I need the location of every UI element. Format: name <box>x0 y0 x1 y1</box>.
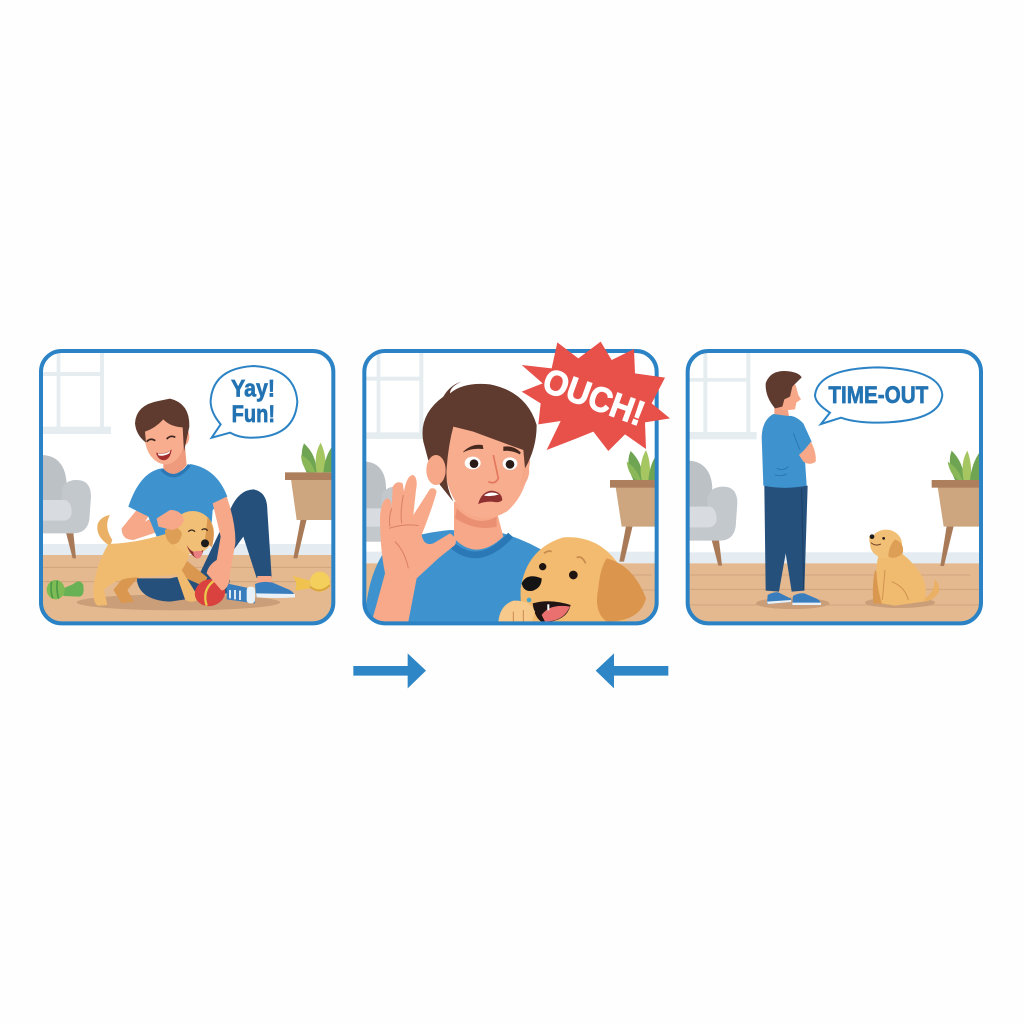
crossed arms <box>799 442 816 464</box>
room floor <box>41 544 333 625</box>
panel 3 frame <box>688 351 981 623</box>
hand on puppy <box>157 510 184 530</box>
OUCH burst <box>522 342 670 451</box>
yellow toy <box>293 572 330 592</box>
red ball <box>194 579 226 606</box>
boy legs <box>764 486 808 592</box>
puppy <box>93 511 214 606</box>
plant table <box>610 450 657 562</box>
boy shirt <box>366 530 541 622</box>
room floor <box>688 552 981 625</box>
room floor <box>364 552 657 623</box>
armchair <box>41 455 91 558</box>
boy shirt <box>128 464 227 537</box>
arrow: left <box>596 653 668 688</box>
panel: playing with the puppy <box>41 351 333 625</box>
boy neck <box>450 502 511 555</box>
OUCH burst: OUCH! <box>538 361 650 434</box>
panel 2 frame <box>364 351 657 623</box>
boy shirt <box>762 414 812 488</box>
plant table <box>285 443 333 558</box>
armchair <box>688 461 737 566</box>
puppy paw with nipped finger <box>498 598 535 623</box>
window <box>366 353 424 439</box>
speech bubble: Yay! Fun!: Yay! <box>231 376 275 403</box>
speech bubble: Yay! Fun!: Fun! <box>232 401 275 428</box>
sneakers <box>227 576 295 603</box>
boy head <box>422 382 537 518</box>
plant table <box>932 451 981 566</box>
panel: puppy bites <box>364 342 670 625</box>
boy neck and head <box>766 371 802 416</box>
green bone toy <box>47 580 84 599</box>
boy arm behind <box>122 510 155 540</box>
speech bubble: Yay! Fun! <box>211 366 297 438</box>
shirt folds <box>775 433 800 476</box>
speech bubble: TIME-OUT: TIME-OUT <box>828 382 929 409</box>
panel: time-out <box>688 351 981 625</box>
window <box>689 353 757 439</box>
boy head <box>135 399 189 476</box>
sitting puppy <box>869 530 939 606</box>
armchair <box>366 462 393 542</box>
raised hand <box>372 475 456 622</box>
boy legs <box>137 489 272 602</box>
speech bubble: TIME-OUT <box>815 367 942 424</box>
puppy head <box>521 537 646 622</box>
sneakers <box>767 592 821 605</box>
window <box>43 353 111 434</box>
arrow: right <box>353 653 426 688</box>
boy near arm <box>207 497 235 591</box>
panel 1 frame <box>41 351 333 623</box>
